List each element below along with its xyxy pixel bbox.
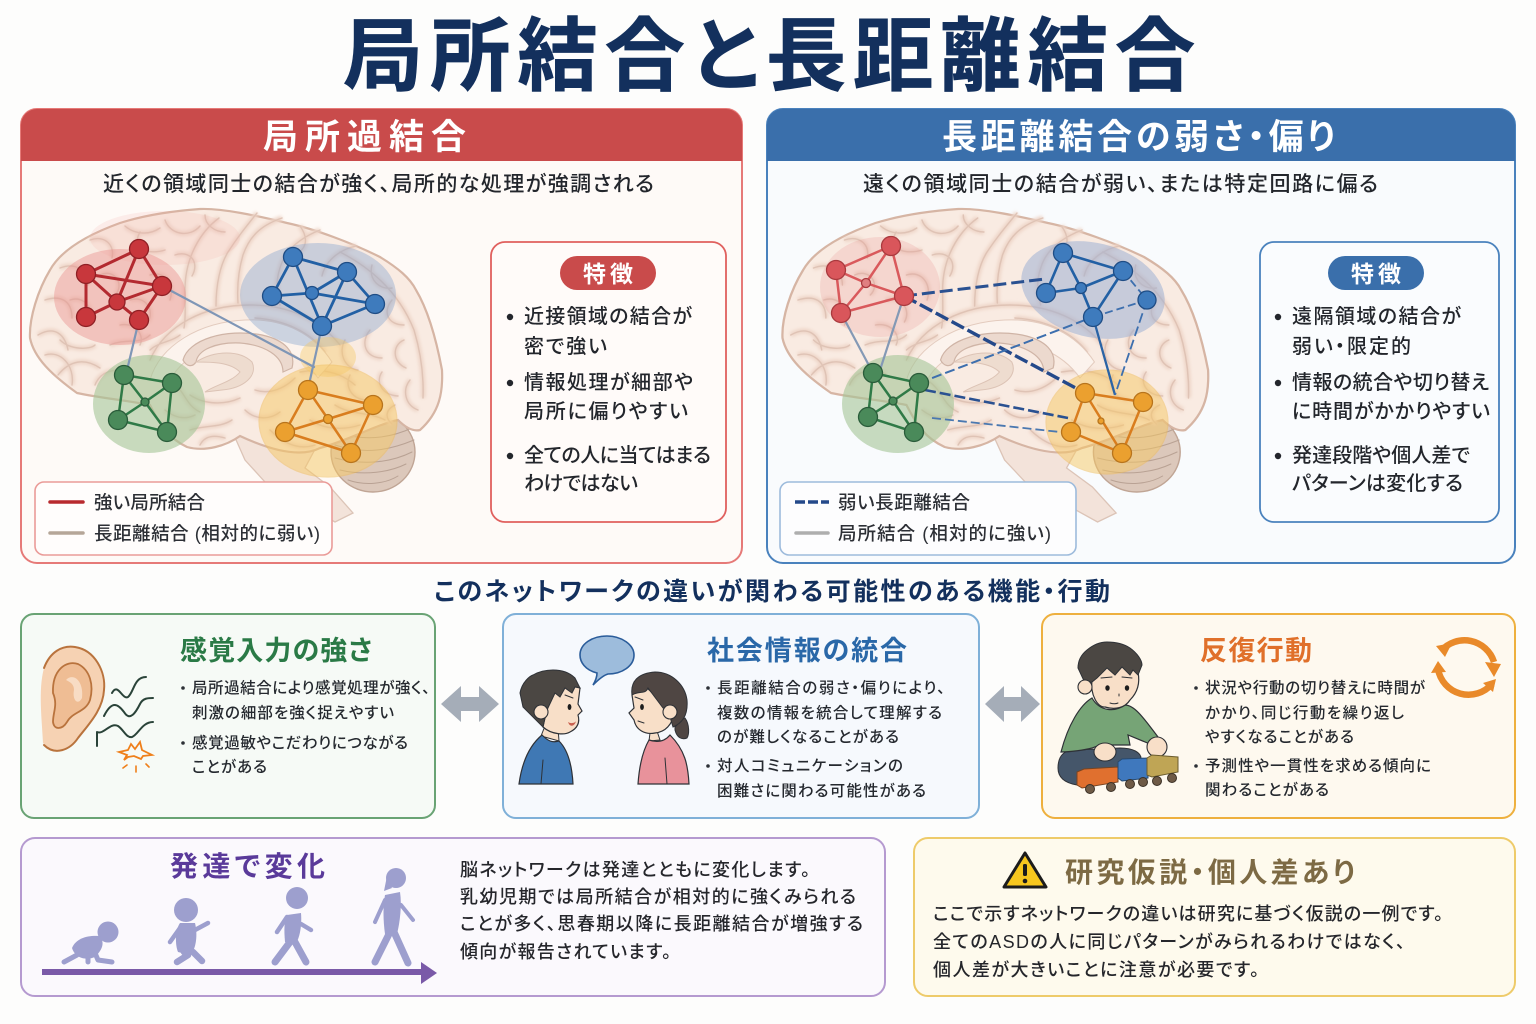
- section heading: このネットワークの違いが関わる可能性のある機能・行動: [434, 577, 1110, 606]
- arrow: social to repetitive: [985, 686, 1040, 722]
- card: social information: [503, 614, 979, 818]
- card text: repetitive: 関わることがある: [1205, 780, 1329, 799]
- panel header: long-distance: [767, 109, 1515, 161]
- text block: research hypothesis: ここで示すネットワークの違いは研究に基づく仮説の一例です。: [933, 904, 1443, 924]
- arrow: development timeline: [42, 962, 437, 984]
- card text: repetitive: やすくなることがある: [1205, 727, 1354, 746]
- card: repetitive behaviour: [1042, 614, 1515, 818]
- card title: social: 社会情報の統合: [707, 636, 907, 666]
- text block: research hypothesis: 個人差が大きいことに注意が必要です。: [933, 959, 1259, 980]
- icon: ear with sound waves: [41, 647, 153, 772]
- feature box: long-distance: [1260, 242, 1499, 522]
- card text: sensory: [181, 678, 430, 776]
- title: 局所結合と長距離結合: [343, 12, 1195, 101]
- panel header: long-distance: 長距離結合の弱さ・偏り: [942, 118, 1335, 157]
- feature box: long-distance: 弱い・限定的: [1292, 335, 1411, 358]
- card text: sensory: 刺激の細部を強く捉えやすい: [192, 704, 394, 722]
- feature box: local: 情報処理が細部や: [524, 371, 693, 394]
- card text: social: 複数の情報を統合して理解する: [717, 704, 942, 722]
- card text: social: 対人コミュニケーションの: [717, 757, 903, 775]
- feature box: local: わけではない: [524, 473, 638, 495]
- card text: social: 長距離結合の弱さ・偏りにより、: [717, 679, 945, 697]
- card text: repetitive: 状況や行動の切り替えに時間が: [1205, 678, 1426, 697]
- text block: development: 傾向が報告されています。: [460, 941, 671, 962]
- card text: sensory: 局所過結合により感覚処理が強く、: [192, 678, 430, 697]
- feature box: local: [491, 242, 726, 522]
- legend: long-distance: 弱い長距離結合: [838, 492, 970, 513]
- brain diagram: local: [30, 209, 442, 522]
- feature box: local: 近接領域の結合が: [524, 305, 692, 328]
- card text: repetitive: 予測性や一貫性を求める傾向に: [1205, 757, 1431, 775]
- icon: growth silhouettes: [64, 868, 413, 963]
- feature box: local: 特徴: [583, 261, 633, 287]
- card text: sensory: 感覚過敏やこだわりにつながる: [192, 733, 408, 752]
- card: sensory input: [21, 614, 435, 818]
- legend: local: 強い局所結合: [94, 492, 205, 513]
- card text: social: 困難さに関わる可能性がある: [717, 781, 926, 800]
- feature box: long-distance: 特徴: [1351, 261, 1401, 287]
- feature box: local: 局所に偏りやすい: [524, 400, 688, 423]
- feature box: long-distance: 遠隔領域の結合が: [1292, 305, 1461, 328]
- card text: repetitive: [1194, 678, 1431, 799]
- legend: long-distance: [780, 482, 1076, 555]
- icon: child playing with toy train: [1058, 642, 1178, 794]
- panel: developmental change: [21, 838, 885, 996]
- feature box: long-distance: 情報の統合や切り替え: [1292, 371, 1489, 394]
- text block: development: 脳ネットワークは発達とともに変化します。: [460, 860, 810, 880]
- panel heading: developmental change: 発達で変化: [170, 851, 325, 882]
- legend: local: [35, 482, 332, 555]
- text block: development: ことが多く、思春期以降に長距離結合が増強する: [460, 913, 863, 934]
- panel: research hypothesis: [914, 838, 1515, 996]
- icon: two children talking: [519, 636, 689, 784]
- feature box: local: 全ての人に当てはまる: [524, 444, 711, 467]
- text block: development: 乳幼児期では局所結合が相対的に強くみられる: [460, 886, 856, 907]
- legend: long-distance: 局所結合 (相対的に強い): [838, 523, 1051, 544]
- icon: repeat arrows: [1431, 640, 1501, 695]
- panel header: local: [21, 109, 742, 161]
- card text: social: のが難しくなることがある: [717, 727, 899, 746]
- feature box: long-distance: に時間がかかりやすい: [1292, 400, 1490, 423]
- card title: repetitive: 反復行動: [1200, 636, 1312, 666]
- text block: research hypothesis: 全てのASDの人に同じパターンがみられるわけではなく、: [933, 931, 1405, 952]
- feature box: local: 密で強い: [524, 335, 607, 358]
- panel: local over-connectivity: [21, 109, 742, 563]
- feature box: long-distance: 発達段階や個人差で: [1292, 444, 1470, 467]
- panel heading: research hypothesis: 研究仮説・個人差あり: [1065, 857, 1355, 888]
- text block: development: [460, 860, 863, 962]
- panel header: local: 局所過結合: [263, 118, 466, 157]
- card text: social: [706, 679, 945, 800]
- panel: long-distance weakness: [767, 109, 1515, 563]
- feature box: long-distance: パターンは変化する: [1292, 472, 1463, 495]
- panel subtitle: long-distance: 遠くの領域同士の結合が弱い、または特定回路に偏る: [863, 173, 1378, 196]
- arrow: sensory to social: [441, 686, 499, 722]
- icon: warning triangle: [1004, 853, 1046, 887]
- card text: sensory: ことがある: [192, 757, 267, 776]
- legend: local: 長距離結合 (相対的に弱い): [94, 523, 320, 544]
- card title: sensory: 感覚入力の強さ: [180, 636, 372, 666]
- text block: research hypothesis: [933, 904, 1443, 980]
- brain diagram: long-distance: [782, 209, 1208, 522]
- card text: repetitive: かかり、同じ行動を繰り返し: [1205, 704, 1405, 722]
- panel subtitle: local: 近くの領域同士の結合が強く、局所的な処理が強調される: [103, 173, 654, 196]
